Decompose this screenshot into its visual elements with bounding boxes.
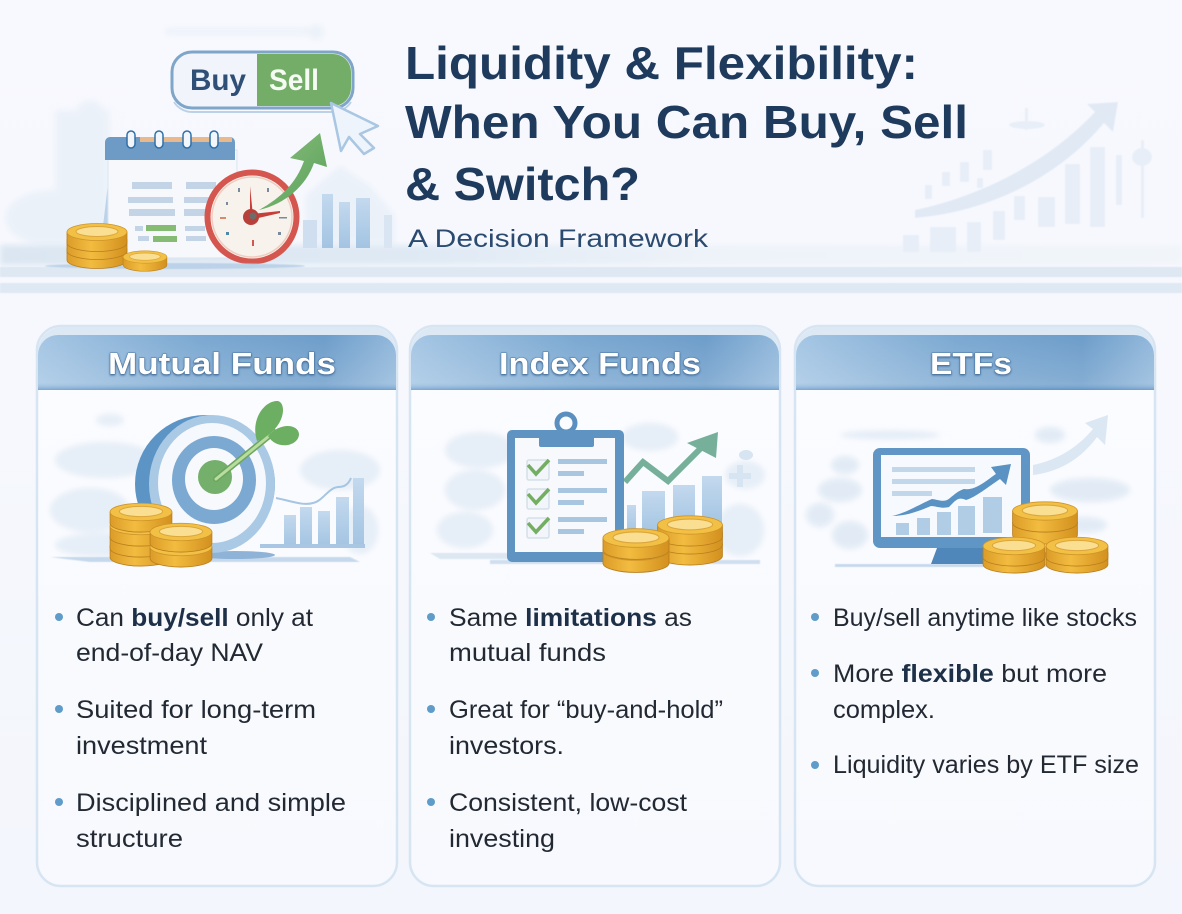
bullet list [55, 604, 346, 853]
title [405, 37, 968, 210]
bullet list: Buy/sell anytime like stocks [833, 604, 1137, 632]
icon: buy sell toggle with cursor [172, 52, 378, 154]
bullet list [427, 604, 723, 853]
title line 1: Liquidity & Flexibility: [405, 37, 918, 89]
bullet list: investment [76, 732, 207, 760]
icon: faded background arrow [1033, 415, 1108, 475]
panel: index funds [410, 326, 780, 886]
bullet list: investors. [449, 732, 564, 760]
icon: calendar [103, 131, 237, 258]
bullet list: More flexible but more [833, 660, 1107, 688]
icon: hero coins [45, 224, 305, 271]
illustration: clipboard with chart and coins [430, 414, 765, 572]
bullet list: complex. [833, 696, 935, 724]
heading: ETFs [930, 346, 1012, 381]
bullet list [811, 604, 1139, 779]
bullet list: structure [76, 825, 183, 853]
icon: clock with arrow [208, 133, 327, 262]
illustration: target with coins and chart [50, 401, 380, 567]
heading: Index Funds [499, 346, 701, 381]
bullet list: end-of-day NAV [76, 639, 263, 667]
bullet list: Can buy/sell only at [76, 604, 313, 632]
bullet list: Great for “buy-and-hold” [449, 696, 723, 724]
icon: clipboard [507, 414, 624, 562]
bullet list: Suited for long-term [76, 696, 316, 724]
label: Buy: Buy [190, 64, 246, 97]
icon: small bars beside clock [303, 194, 392, 248]
icon: cursor [331, 103, 378, 154]
bullet list: Same limitations as [449, 604, 692, 632]
icon: green zigzag arrow [625, 432, 718, 482]
panel: mutual funds [37, 326, 397, 886]
bullet list: investing [449, 825, 555, 853]
label: Sell: Sell [269, 64, 319, 97]
title line 2: When You Can Buy, Sell [405, 96, 968, 148]
bullet list: Liquidity varies by ETF size [833, 751, 1139, 779]
hero banner background [0, 24, 1182, 293]
bullet list: mutual funds [449, 639, 606, 667]
bullet list: Disciplined and simple [76, 789, 346, 817]
title line 3: & Switch? [405, 158, 640, 210]
panel: etfs [795, 326, 1155, 886]
illustration: monitor with coins [806, 415, 1130, 573]
icon: dart [216, 401, 299, 479]
heading: Mutual Funds [108, 346, 336, 381]
icon: monitor [873, 448, 1030, 564]
subtitle: A Decision Framework [408, 225, 709, 253]
icon: green arrow [259, 133, 327, 210]
bullet list: Consistent, low-cost [449, 789, 687, 817]
faded rising chart in hero background [903, 102, 1152, 252]
